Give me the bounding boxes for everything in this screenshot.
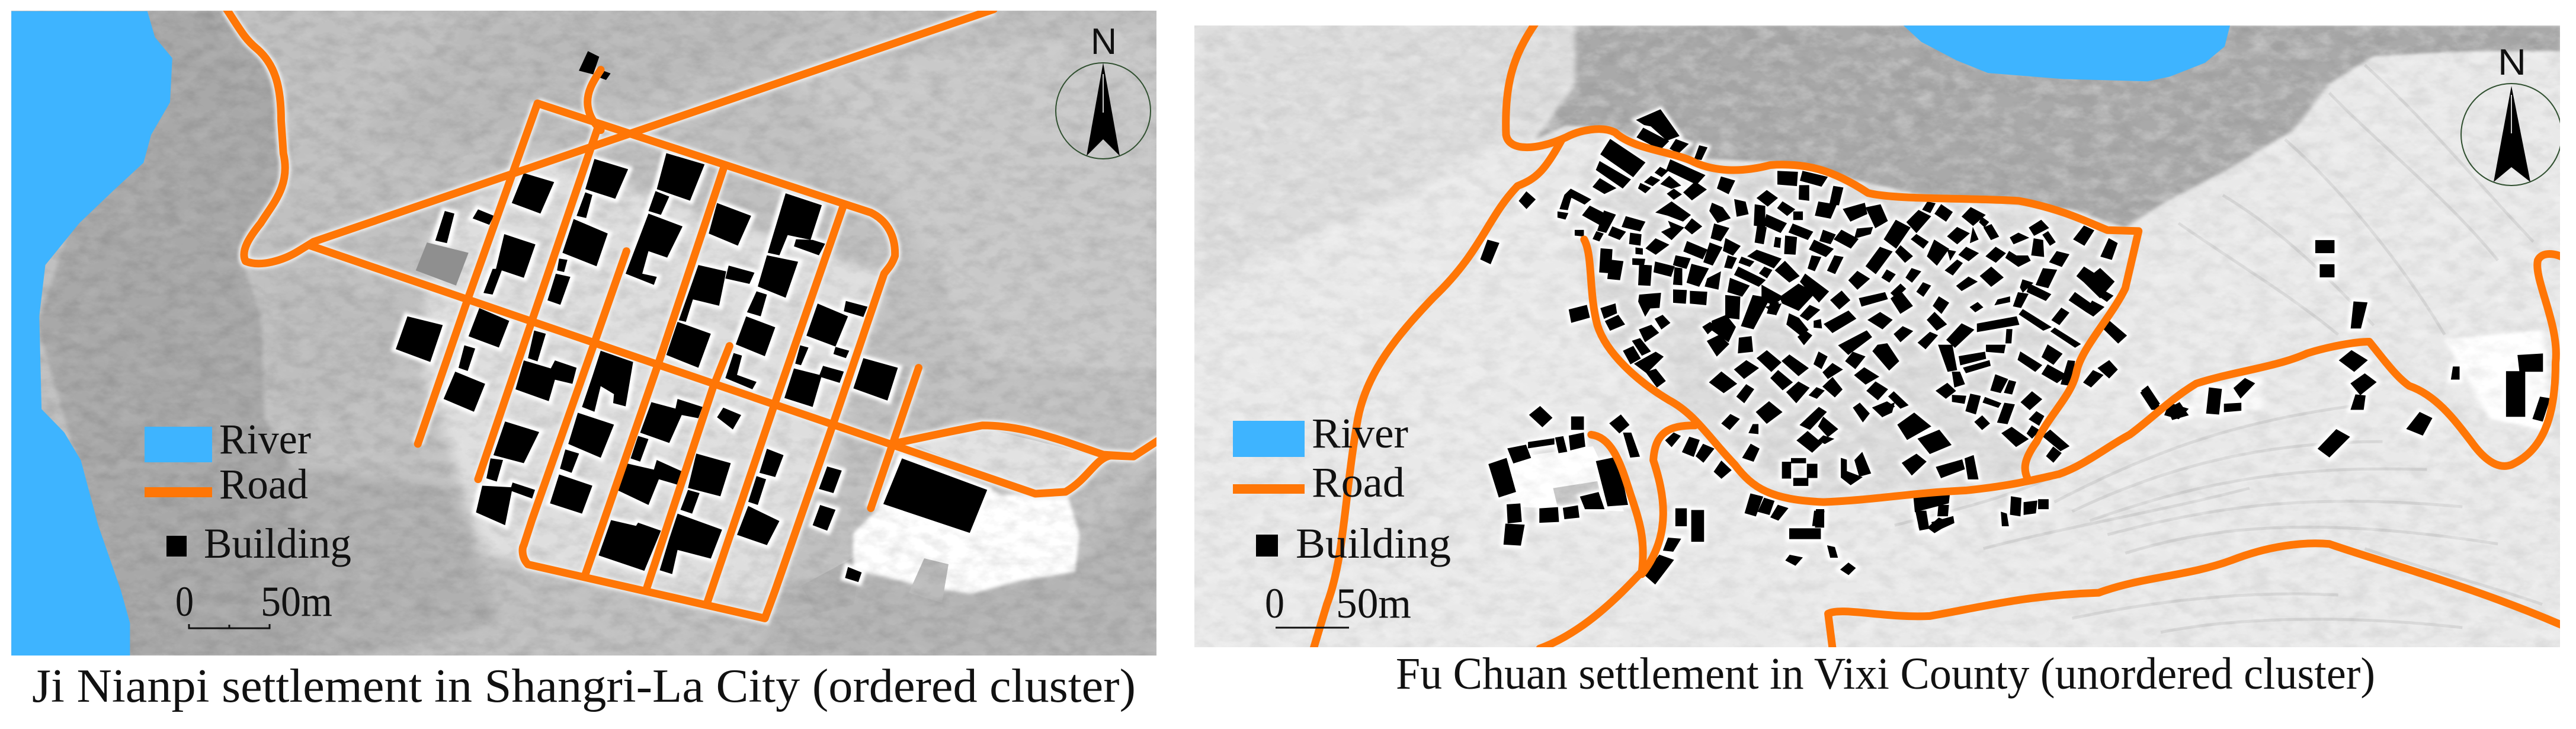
icon: north arrow Fu Chuan: N bbox=[2498, 42, 2526, 83]
roads bbox=[227, 9, 1160, 618]
legend label: River: River bbox=[219, 415, 311, 463]
legend swatch: road bbox=[145, 487, 212, 497]
legend swatch: river bbox=[145, 427, 212, 462]
scale bar: Fu Chuan: 0 bbox=[1265, 580, 1284, 627]
icon: north arrow Ji Nianpi bbox=[1056, 21, 1151, 159]
buildings bbox=[396, 51, 987, 582]
caption: Ji Nianpi: Ji Nianpi settlement in Shangri-La City (ordered cluster) bbox=[32, 660, 1136, 712]
legend label: Road: Road bbox=[219, 461, 308, 508]
scale bar: Fu Chuan: 50m bbox=[1336, 580, 1411, 627]
panel: Fu Chuan settlement map bbox=[1194, 23, 2564, 648]
legend: Ji Nianpi bbox=[145, 415, 351, 567]
roads bbox=[1313, 23, 2564, 648]
scale bar: Fu Chuan bbox=[1265, 580, 1411, 628]
scale bar: Ji Nianpi bbox=[175, 578, 332, 628]
scale bar: Ji Nianpi: 0 bbox=[175, 578, 194, 625]
legend swatch: building bbox=[1256, 535, 1278, 557]
caption: Fu Chuan: Fu Chuan settlement in Vixi County (unordered cluster) bbox=[1396, 649, 2375, 699]
legend swatch: road bbox=[1233, 484, 1305, 494]
buildings bbox=[1481, 110, 2549, 583]
icon: north arrow Ji Nianpi: N bbox=[1091, 21, 1117, 62]
terraces bbox=[1895, 65, 2542, 632]
river bbox=[1904, 25, 2230, 81]
legend label: Road: Road bbox=[1312, 459, 1405, 506]
legend label: Building: Building bbox=[1296, 520, 1451, 567]
icon: north arrow Fu Chuan bbox=[2461, 42, 2562, 186]
river bbox=[11, 11, 172, 656]
legend swatch: river bbox=[1233, 421, 1305, 457]
legend: Fu Chuan bbox=[1233, 410, 1451, 567]
legend swatch: building bbox=[166, 536, 187, 557]
grey building bbox=[416, 242, 469, 286]
panel: Ji Nianpi settlement map bbox=[11, 9, 1160, 656]
legend label: Building: Building bbox=[204, 520, 351, 567]
scale bar: Ji Nianpi: 50m bbox=[261, 578, 332, 625]
legend label: River: River bbox=[1312, 410, 1408, 457]
